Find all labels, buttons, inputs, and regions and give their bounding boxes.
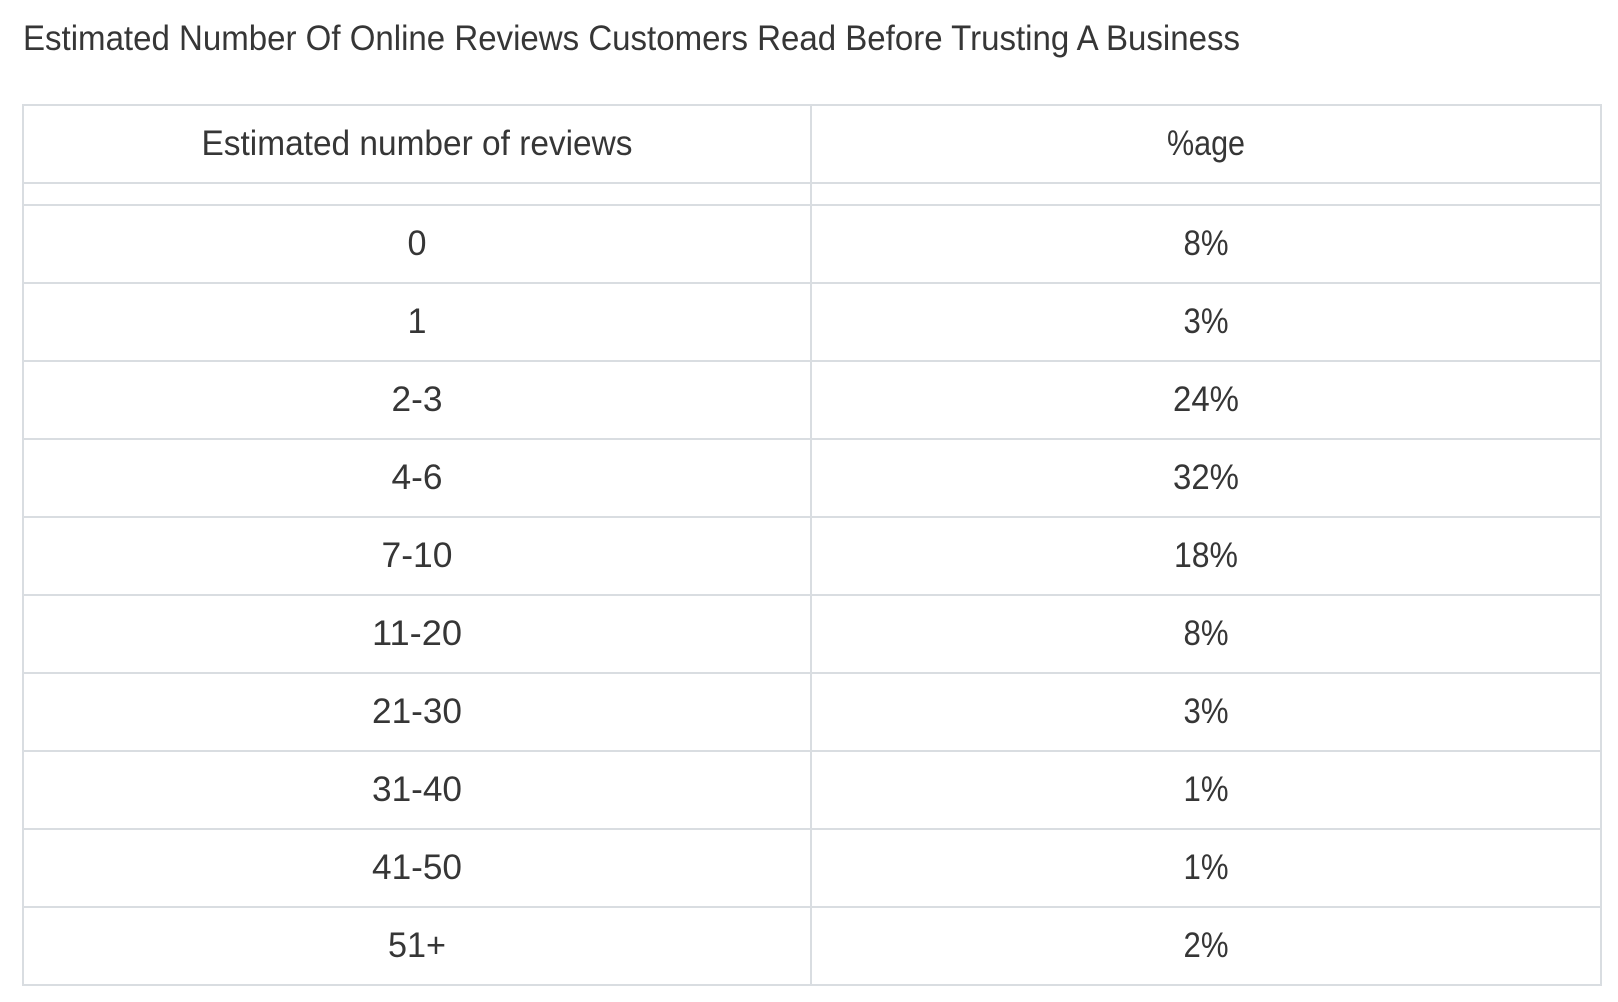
row: 7-10 reviews, 18%: 7-10: [382, 536, 452, 575]
row: 41-50 reviews, 1%: [372, 848, 1228, 887]
row: 1 review, 3%: [408, 302, 1228, 341]
row: 11-20 reviews, 8%: 8%: [1184, 614, 1228, 653]
row: 4-6 reviews, 32%: [392, 458, 1239, 497]
row: 4-6 reviews, 32%: 4-6: [392, 458, 442, 497]
row: 2-3 reviews, 24%: [392, 380, 1239, 419]
header row: Estimated number of reviews: [202, 124, 632, 163]
row: 1 review, 3%: 1: [408, 302, 426, 341]
row: 21-30 reviews, 3%: 3%: [1184, 692, 1228, 731]
row: 4-6 reviews, 32%: 32%: [1173, 458, 1239, 497]
row: 41-50 reviews, 1%: 1%: [1184, 848, 1228, 887]
header row: %age: [1167, 124, 1245, 163]
row: 31-40 reviews, 1%: [372, 770, 1228, 809]
row: 41-50 reviews, 1%: 41-50: [372, 848, 462, 887]
row: 7-10 reviews, 18%: [382, 536, 1238, 575]
row: 11-20 reviews, 8%: [372, 614, 1228, 653]
row: 31-40 reviews, 1%: 1%: [1184, 770, 1228, 809]
row: 21-30 reviews, 3%: [372, 692, 1228, 731]
row: 31-40 reviews, 1%: 31-40: [372, 770, 462, 809]
row: 51+ reviews, 2%: [388, 926, 1228, 965]
header row: [202, 124, 1245, 163]
row: 51+ reviews, 2%: 2%: [1184, 926, 1228, 965]
row: 2-3 reviews, 24%: 24%: [1173, 380, 1239, 419]
row: 0 reviews, 8%: 0: [408, 224, 426, 263]
row: 11-20 reviews, 8%: 11-20: [372, 614, 462, 653]
row: 2-3 reviews, 24%: 2-3: [392, 380, 442, 419]
row: 21-30 reviews, 3%: 21-30: [372, 692, 462, 731]
row: 1 review, 3%: 3%: [1184, 302, 1228, 341]
row: 0 reviews, 8%: [408, 224, 1228, 263]
row: 0 reviews, 8%: 8%: [1184, 224, 1228, 263]
row: 51+ reviews, 2%: 51+: [388, 926, 446, 965]
row: 7-10 reviews, 18%: 18%: [1174, 536, 1238, 575]
title: Estimated Number Of Online Reviews Customers Read Before Trusting A Business: [23, 19, 1240, 58]
